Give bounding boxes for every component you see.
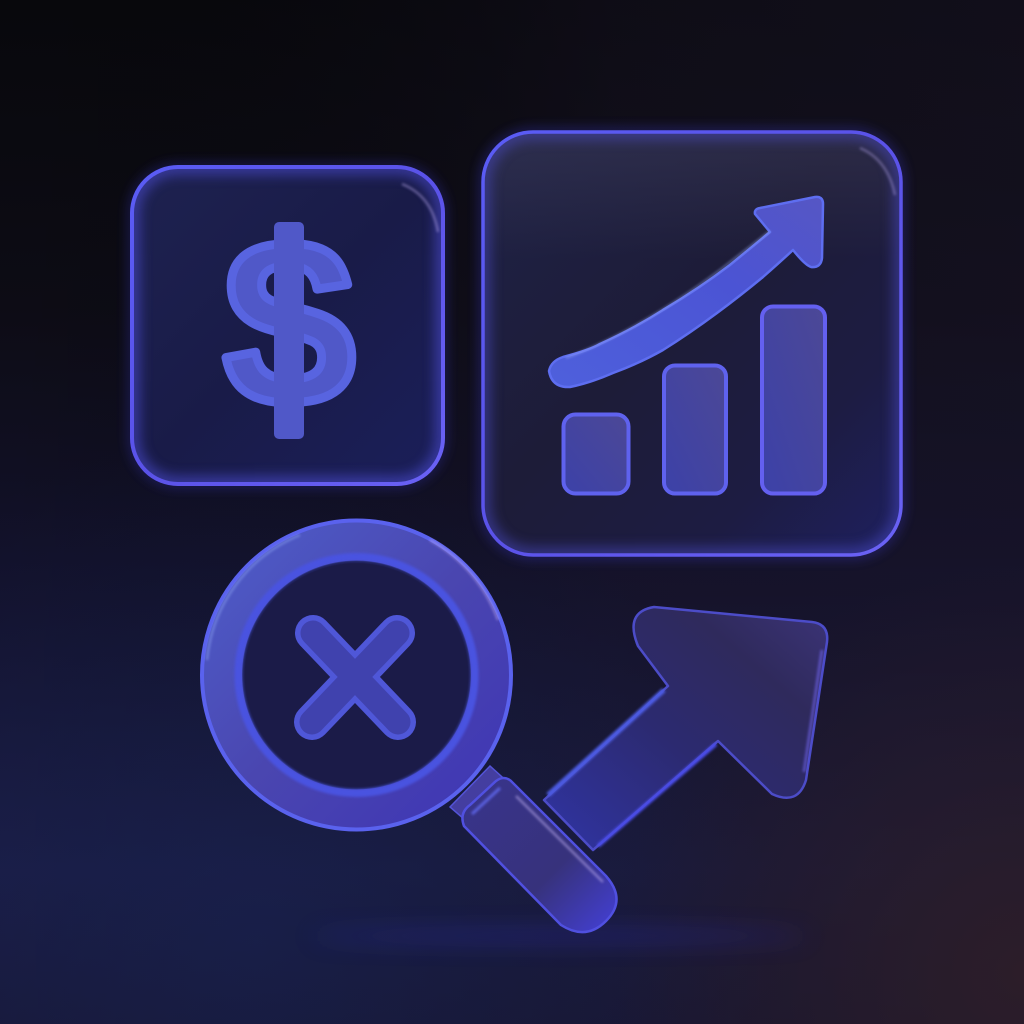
panel: growth chart card bbox=[483, 132, 901, 555]
floor glow bbox=[310, 931, 810, 941]
icon: rising trend arrow bbox=[549, 197, 823, 387]
magnifier handle bbox=[462, 778, 616, 932]
icon: X mark bbox=[312, 633, 398, 722]
panel: dollar card bbox=[132, 167, 443, 484]
icon: large arrow bbox=[544, 607, 827, 850]
icon: magnifying glass bbox=[202, 520, 616, 932]
bar chart bbox=[564, 306, 825, 494]
magnifier lens bbox=[244, 562, 470, 788]
magnifier connector bbox=[450, 766, 512, 826]
icon: dollar sign: $ bbox=[223, 191, 355, 456]
